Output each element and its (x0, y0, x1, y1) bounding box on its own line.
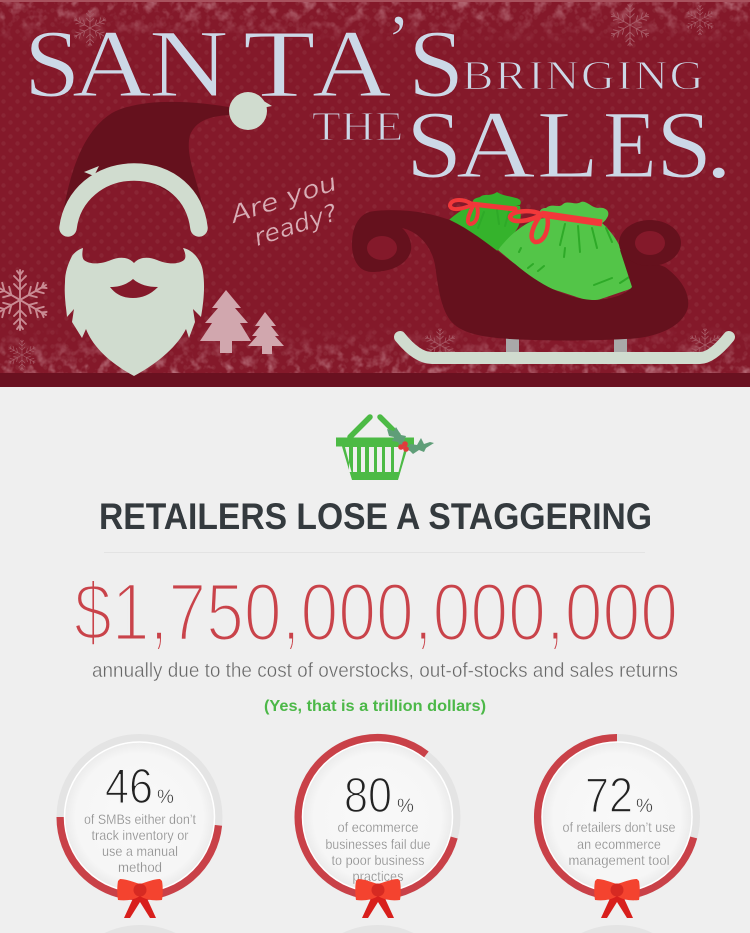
title: S (406, 92, 462, 199)
icon: santa beard (65, 248, 204, 376)
stat: 46 percent: track inventory or (92, 828, 189, 843)
stat: 46 percent: of SMBs either don’t (84, 812, 196, 827)
text: are you ready: ready? (250, 198, 341, 252)
title: THE (312, 104, 403, 149)
icon: snowflake (0, 270, 49, 330)
title: N (149, 11, 228, 117)
next row of stat rings, cropped (104, 925, 653, 933)
text: are you ready (225, 168, 349, 257)
stat: 72 percent: an ecommerce (577, 837, 661, 852)
stat: 80 percent: businesses fail due (326, 837, 430, 852)
title: S (24, 11, 80, 118)
stat: 80 percent: practices (352, 869, 404, 884)
title: S (408, 11, 464, 118)
title: T (243, 10, 316, 117)
callout: trillion dollars: (Yes, that is a trillion dollars) (264, 698, 486, 715)
title: BRINGING (462, 53, 705, 98)
title: A (456, 92, 536, 198)
title: L (537, 92, 599, 199)
title: A (312, 11, 392, 117)
text: are you ready: Are you (225, 168, 340, 230)
title (24, 0, 733, 199)
stat: 46 percent: 46 (105, 760, 153, 814)
title: S (656, 92, 712, 199)
title: . (705, 92, 733, 198)
stat: 80 percent: 80 (344, 769, 392, 823)
subheading text: annually due to the cost of overstocks, out-of-stocks and sales returns (92, 660, 678, 682)
stat: 72 percent: 72 (585, 769, 633, 823)
title: A (72, 11, 152, 117)
panel: hero banner (0, 0, 750, 387)
title: E (603, 92, 657, 199)
icon: pine trees (200, 290, 284, 354)
stat: 72 percent: management tool (568, 853, 670, 868)
stat: 46 percent (60, 738, 218, 918)
stat: 72 percent (538, 738, 696, 918)
stat: 72 percent: % (636, 796, 653, 817)
icon: shopping basket with holly (336, 417, 434, 480)
stat: 80 percent: % (397, 796, 414, 817)
title: ’ (386, 0, 411, 83)
stat: 80 percent (298, 738, 456, 918)
stat: 80 percent: to poor business (332, 853, 425, 868)
heading: RETAILERS LOSE A STAGGERING (99, 496, 652, 537)
stat: 80 percent: of ecommerce (338, 820, 418, 835)
icon: sleigh with gift sacks (352, 192, 729, 358)
icon: santa hat (64, 92, 272, 228)
stat: 46 percent: use a manual (102, 844, 178, 859)
stat: 72 percent: of retailers don’t use (562, 820, 676, 835)
stat: 46 percent: % (157, 787, 174, 808)
stat: 46 percent: method (118, 860, 162, 875)
